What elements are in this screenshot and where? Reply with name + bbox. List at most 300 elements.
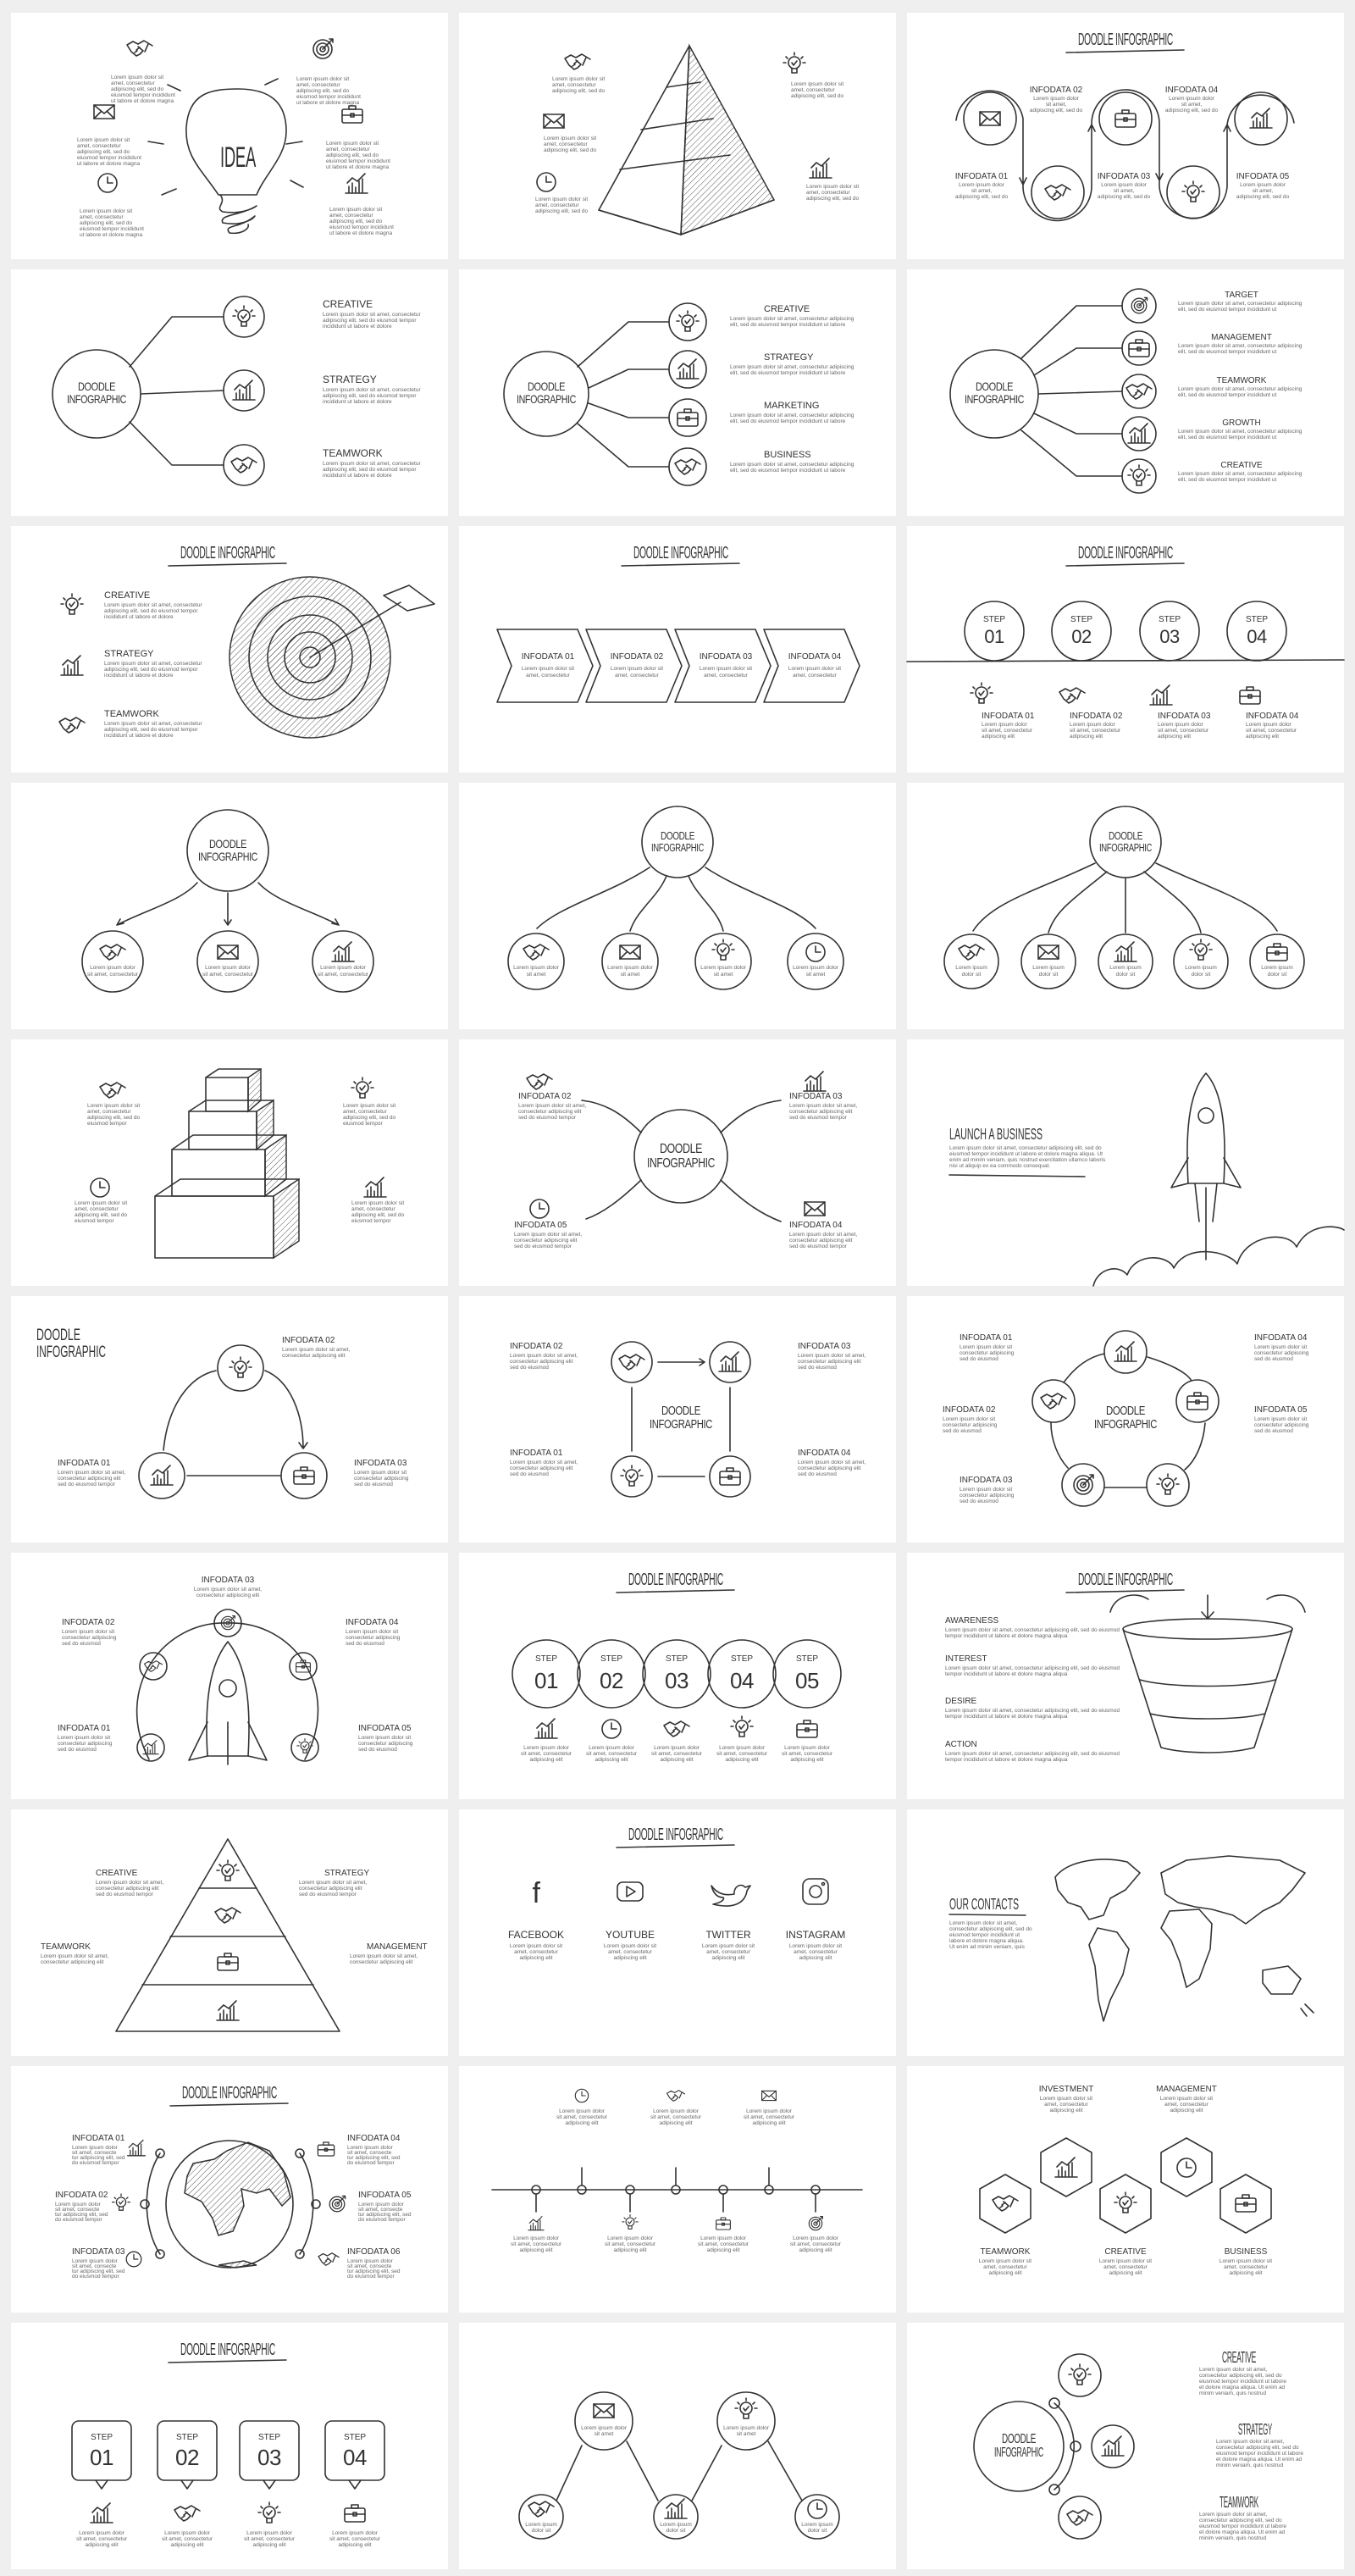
corner items: INFODATA 03 [789, 1092, 843, 1101]
labels: Lorem ipsum dolor [1240, 182, 1286, 188]
main circle: INFOGRAPHIC [67, 392, 126, 406]
step items: Lorem ipsum dolor [332, 2530, 379, 2536]
labels: INFODATA 02 [943, 1405, 996, 1415]
labels: INVESTMENT [1039, 2085, 1093, 2094]
step boxes: STEP [91, 2433, 113, 2442]
text: right 2: adipiscing elit, sed do [806, 196, 860, 202]
circles: Lorem ipsum [525, 2522, 557, 2528]
panel: launch a business [907, 1039, 1344, 1286]
step items: sit amet, consectetur [1246, 728, 1297, 734]
labels: adipiscing elit, sed do [1030, 108, 1082, 114]
top circle [642, 806, 713, 878]
step circles: STEP [983, 615, 1005, 624]
labels: INFODATA 01 [960, 1333, 1013, 1343]
circles: dolor sit [532, 2528, 551, 2534]
branch circles [669, 303, 706, 485]
step items: INFODATA 03 [1158, 712, 1211, 721]
step boxes: 01 [90, 2445, 113, 2470]
text: bottom left: amet, consectetur [80, 214, 124, 220]
labels [955, 86, 1290, 200]
chevron steps: INFODATA 03 [700, 652, 753, 662]
labels: Lorem ipsum dolor [1101, 182, 1148, 188]
panel: step boxes [11, 2323, 448, 2569]
main circle [974, 2401, 1064, 2491]
title: DOODLE INFOGRAPHIC [628, 1825, 723, 1844]
panel: cycle 3 [11, 1296, 448, 1543]
labels: INTEREST [945, 1654, 987, 1664]
heading: LAUNCH A BUSINESS [949, 1126, 1043, 1143]
text: right 1: amet, consectetur [791, 87, 835, 93]
labels: consectetur adipiscing elit [299, 1886, 362, 1892]
right items: sit amet, consecte [358, 2207, 403, 2213]
top circle: INFOGRAPHIC [198, 850, 257, 863]
labels: sed do eiusmod [960, 1356, 998, 1362]
text: top right: Lorem ipsum dolor sit [296, 76, 349, 82]
rocket [189, 1642, 267, 1764]
step items: sit amet, consectetur [329, 2536, 381, 2542]
labels: tempor incididunt ut labore et dolore magna aliqua [945, 1633, 1068, 1639]
text: top left: eiusmod tempor incididunt [111, 92, 175, 98]
panel: hexagons [907, 2066, 1344, 2313]
labels: Lorem ipsum dolor sit amet, consectetur adipiscing [730, 364, 854, 370]
chevron steps: amet, consectetur [615, 673, 660, 679]
labels: Lorem ipsum dolor sit [1254, 1344, 1307, 1350]
labels: Lorem ipsum dolor [959, 182, 1005, 188]
left items: Lorem ipsum dolor [55, 2202, 102, 2208]
corner items: Lorem ipsum dolor sit amet, [789, 1103, 857, 1109]
step circles: STEP [1246, 615, 1268, 624]
labels: consectetur adipiscing [358, 1741, 413, 1747]
text: right 2: amet, consectetur [806, 190, 850, 196]
labels: sed do eiusmod [354, 1482, 393, 1487]
labels: Lorem ipsum dolor sit [960, 1344, 1012, 1350]
items below: adipiscing elit [706, 2247, 740, 2253]
step items: adipiscing elit [982, 734, 1015, 740]
labels: elit, sed do eiusmod tempor incididunt ut [1178, 435, 1277, 440]
branch circles [1122, 289, 1156, 493]
labels: consectetur adipiscing [1254, 1350, 1309, 1356]
labels: Lorem ipsum dolor [1169, 96, 1215, 102]
circles: Lorem ipsum dolor [723, 2425, 770, 2431]
labels: Lorem ipsum dolor sit [354, 1470, 406, 1476]
main circle: INFOGRAPHIC [517, 392, 576, 406]
items above: Lorem ipsum dolor [653, 2108, 700, 2114]
step items: Lorem ipsum dolor [719, 1745, 766, 1751]
social icons [533, 1877, 828, 1909]
text: top left: adipiscing elit, sed do [111, 86, 164, 92]
labels: sed do eiusmod [960, 1499, 998, 1504]
bottom circles: dolor sit [1192, 972, 1211, 978]
step items: adipiscing elit [529, 1757, 563, 1763]
step boxes: 03 [257, 2445, 281, 2470]
step items: adipiscing elit [1070, 734, 1103, 740]
labels: INFODATA 01 [58, 1724, 111, 1733]
labels: TEAMWORK [1217, 376, 1267, 385]
bottom circles: dolor sit [1116, 972, 1136, 978]
labels: elit, sed do eiusmod tempor incididunt ut labore [730, 418, 846, 424]
labels: consectetur adipiscing elit [41, 1959, 104, 1965]
items above: adipiscing elit [752, 2120, 786, 2126]
labels: Lorem ipsum dolor [1033, 96, 1080, 102]
hexagons [980, 2138, 1271, 2233]
icon: bulb [783, 53, 805, 73]
bottom circles: sit amet, consectetur [87, 972, 139, 978]
step items: INFODATA 02 [1070, 712, 1123, 721]
bottom circles [508, 933, 843, 989]
labels: DESIRE [945, 1697, 977, 1706]
icon: chart [810, 158, 832, 178]
labels: adipiscing elit, sed do eiusmod tempor [323, 393, 417, 399]
text: left 1: Lorem ipsum dolor sit [552, 76, 605, 82]
icon: target [313, 39, 333, 58]
text block: nisi ut aliquip ex ea commodo consequat. [949, 1163, 1050, 1169]
panel: snake infodata [907, 13, 1344, 259]
labels: Lorem ipsum dolor sit [960, 1487, 1012, 1493]
labels: elit, sed do eiusmod tempor incididunt ut [1178, 477, 1277, 483]
left items [55, 2134, 145, 2280]
labels [1178, 291, 1302, 483]
step items [76, 2502, 381, 2548]
labels: et dolore magna aliqua. Ut enim ad [1216, 2457, 1302, 2462]
step circles: 05 [795, 1668, 819, 1693]
corner items: sed do eiusmod tempor [514, 1244, 572, 1249]
left items: incididunt ut labore et dolore [104, 614, 174, 620]
left items: Lorem ipsum dolor sit amet, consectetur [104, 602, 202, 608]
step items: Lorem ipsum dolor [1246, 722, 1292, 728]
labels: consectetur adipiscing elit, sed do [1199, 2518, 1282, 2523]
top circle: DOODLE [661, 829, 695, 842]
right items: adipiscing elit, sed do [343, 1115, 396, 1121]
left items: STRATEGY [104, 649, 154, 659]
title [36, 1327, 106, 1361]
labels: incididunt ut labore et dolore [323, 324, 392, 330]
labels: consectetur adipiscing [354, 1476, 409, 1482]
right items: Lorem ipsum dolor sit [343, 1103, 395, 1109]
labels: sed do eiusmod [798, 1365, 837, 1371]
labels: TEAMWORK [1220, 2494, 1258, 2511]
chevron steps: Lorem ipsum dolor sit [788, 666, 841, 672]
labels: Lorem ipsum dolor sit amet, consectetur [323, 461, 421, 467]
labels: consectetur adipiscing elit, sed do [1199, 2373, 1282, 2379]
cycle circles [1032, 1331, 1219, 1506]
step circles: 01 [534, 1668, 558, 1693]
labels: INFODATA 04 [1165, 86, 1219, 95]
chevron steps [497, 629, 860, 702]
labels: consectetur adipiscing elit [96, 1886, 159, 1892]
branch circles [224, 296, 264, 485]
labels: elit, sed do eiusmod tempor incididunt ut [1178, 349, 1277, 355]
labels: sed do eiusmod [943, 1428, 982, 1434]
labels: Lorem ipsum dolor sit amet, [798, 1353, 866, 1359]
labels: YOUTUBE [606, 1929, 655, 1941]
clouds [1093, 1227, 1344, 1286]
text: mid left: amet, consectetur [77, 143, 121, 149]
corner items: sed do eiusmod tempor [789, 1244, 848, 1249]
labels [58, 1576, 413, 1753]
icon: clock [537, 173, 556, 191]
step items: sit amet, consectetur [1158, 728, 1209, 734]
left items: Lorem ipsum dolor sit [75, 1200, 127, 1206]
labels: INFODATA 05 [358, 1724, 412, 1733]
step items: adipiscing elit [1158, 734, 1191, 740]
labels: CREATIVE [1220, 461, 1263, 470]
text: top left: amet, consectetur [111, 80, 155, 86]
left items: eiusmod tempor [75, 1218, 114, 1224]
chevron steps: Lorem ipsum dolor sit [522, 666, 574, 672]
labels: sed do eiusmod [510, 1365, 549, 1371]
labels: adipiscing elit [1170, 2108, 1203, 2113]
step items: Lorem ipsum dolor [654, 1745, 700, 1751]
labels: Lorem ipsum dolor sit amet, consectetur adipiscing [730, 316, 854, 322]
labels: Lorem ipsum dolor sit amet, [798, 1460, 866, 1465]
labels: consectetur adipiscing elit [282, 1353, 346, 1359]
labels: ACTION [945, 1740, 977, 1749]
corner items: INFODATA 04 [789, 1221, 843, 1230]
title: DOODLE INFOGRAPHIC [180, 2341, 275, 2359]
step items: Lorem ipsum dolor [1070, 722, 1116, 728]
right items: amet, consectetur [343, 1109, 387, 1115]
panel: idea bulb [11, 13, 448, 259]
labels: INFODATA 03 [354, 1459, 407, 1468]
main circle [53, 350, 141, 438]
step items: adipiscing elit [1246, 734, 1279, 740]
panel: pyramid [459, 13, 896, 259]
labels: adipiscing elit, sed do [955, 194, 1008, 200]
labels: amet, consectetur [983, 2264, 1028, 2270]
title: IDEA: IDEA [220, 141, 256, 174]
text: left 1: adipiscing elit, sed do [552, 88, 606, 94]
labels: sed do eiusmod [1254, 1356, 1293, 1362]
left items [75, 1083, 141, 1224]
labels: consectetur adipiscing elit [350, 1959, 413, 1965]
step items: Lorem ipsum dolor [589, 1745, 635, 1751]
items above: Lorem ipsum dolor [746, 2108, 793, 2114]
labels: elit, sed do eiusmod tempor incididunt ut labore [730, 370, 846, 376]
panel: tree 3 [11, 783, 448, 1029]
labels: minim veniam, quis nostrud [1199, 2535, 1266, 2541]
circles: dolor sit [808, 2528, 827, 2534]
stacked boxes [155, 1069, 299, 1258]
items above: sit amet, consectetur [744, 2114, 795, 2120]
step items: INFODATA 04 [1246, 712, 1299, 721]
labels [510, 1342, 866, 1477]
labels: STRATEGY [1238, 2421, 1272, 2438]
panel: tree 4 [459, 783, 896, 1029]
labels: elit, sed do eiusmod tempor incididunt ut labore [730, 322, 846, 328]
left items: sit amet, consecte [55, 2207, 100, 2213]
labels: eiusmod tempor incididunt ut labore [1199, 2523, 1286, 2529]
chevron steps: amet, consectetur [704, 673, 749, 679]
step items: Lorem ipsum dolor [164, 2530, 211, 2536]
left items: incididunt ut labore et dolore [104, 733, 174, 739]
labels: Lorem ipsum dolor sit amet, consectetur adipiscing elit, sed do eiusmod [945, 1665, 1120, 1671]
step boxes [72, 2421, 384, 2489]
labels: sed do eiusmod [798, 1471, 837, 1477]
panel: triangle layers [11, 1809, 448, 2056]
labels: Lorem ipsum dolor sit [1040, 2096, 1092, 2102]
labels: amet, consectetur [1103, 2264, 1148, 2270]
left items: amet, consectetur [87, 1109, 131, 1115]
left items: INFODATA 01 [72, 2134, 125, 2143]
labels: consectetur adipiscing [960, 1350, 1015, 1356]
labels [508, 1929, 845, 1961]
text: left 3: adipiscing elit, sed do [535, 208, 589, 214]
bottom circles: sit amet, consectetur [202, 972, 254, 978]
corner items: sed do eiusmod tempor [789, 1115, 848, 1121]
step items: sit amet, consectetur [782, 1751, 833, 1757]
text: bottom left: Lorem ipsum dolor sit [80, 208, 132, 214]
panel: target [11, 526, 448, 773]
bottom circles [944, 934, 1304, 989]
labels: sit amet, [1181, 102, 1202, 108]
step circles: STEP [731, 1654, 753, 1664]
items below: sit amet, consectetur [605, 2241, 656, 2247]
bottom circles: Lorem ipsum [1109, 965, 1142, 971]
labels: CREATIVE [96, 1869, 138, 1878]
labels [979, 2085, 1272, 2276]
right items [343, 1077, 405, 1224]
labels [943, 1333, 1309, 1504]
left items [59, 590, 202, 739]
labels: CREATIVE [1222, 2349, 1256, 2366]
panel: timeline [459, 2066, 896, 2313]
panel: globe [11, 2066, 448, 2313]
main circle: INFOGRAPHIC [965, 392, 1024, 406]
panel: five steps [459, 1553, 896, 1799]
circles: sit amet [737, 2431, 756, 2437]
icon: clock [98, 174, 117, 192]
bottom circles: sit amet [527, 972, 546, 978]
labels: Lorem ipsum dolor sit amet, [41, 1953, 108, 1959]
labels: adipiscing elit [519, 1955, 553, 1961]
circles [519, 2392, 839, 2539]
items above: adipiscing elit [565, 2120, 599, 2126]
left items: amet, consectetur [75, 1206, 119, 1212]
corner items: consectetur adipiscing elit [518, 1109, 582, 1115]
top circle: INFOGRAPHIC [651, 841, 704, 854]
right items: tur adipiscing elit, sed [347, 2269, 401, 2274]
labels: INFODATA 02 [1030, 86, 1083, 95]
labels [41, 1869, 428, 1965]
items above [556, 2089, 795, 2126]
title: DOODLE INFOGRAPHIC [628, 1571, 723, 1589]
left items: do eiusmod tempor [72, 2160, 119, 2166]
text: right 1: adipiscing elit, sed do [791, 93, 844, 99]
items below: adipiscing elit [613, 2247, 647, 2253]
cycle circles [139, 1345, 327, 1499]
labels: Lorem ipsum dolor sit amet, consectetur adipiscing [1178, 471, 1302, 477]
center text: INFOGRAPHIC [1094, 1417, 1157, 1432]
labels: adipiscing elit, sed do [1165, 108, 1218, 114]
chevron steps: Lorem ipsum dolor sit [700, 666, 752, 672]
bottom circles: Lorem ipsum [955, 965, 987, 971]
step items: sit amet, consectetur [521, 1751, 572, 1757]
labels: adipiscing elit [988, 2270, 1022, 2276]
center text: INFOGRAPHIC [650, 1417, 712, 1432]
bottom circles: Lorem ipsum dolor [320, 965, 367, 971]
labels [1199, 2349, 1303, 2541]
right items: amet, consectetur [351, 1206, 395, 1212]
labels: consectetur adipiscing elit [196, 1593, 259, 1598]
labels: MANAGEMENT [1211, 333, 1272, 342]
left items: sit amet, consecte [72, 2263, 117, 2269]
arrows [973, 863, 1277, 933]
labels: Lorem ipsum dolor sit amet, [350, 1953, 418, 1959]
arrows [537, 867, 816, 931]
left items: tur adipiscing elit, sed [72, 2155, 125, 2161]
labels: INFODATA 05 [1254, 1405, 1308, 1415]
chevron steps: INFODATA 01 [522, 652, 575, 662]
step items: Lorem ipsum dolor [523, 1745, 570, 1751]
bottom circles: dolor sit [962, 972, 982, 978]
labels [58, 1336, 409, 1487]
panel: four branches [459, 269, 896, 516]
labels: INFODATA 01 [58, 1459, 111, 1468]
labels: INFODATA 03 [1098, 172, 1151, 181]
labels: Lorem ipsum dolor sit [1254, 1416, 1307, 1422]
globe [166, 2141, 293, 2268]
labels: INFODATA 01 [510, 1449, 563, 1458]
labels: Lorem ipsum dolor sit amet, consectetur adipiscing [1178, 301, 1302, 307]
text: mid right: eiusmod tempor incididunt [326, 158, 390, 164]
labels: Lorem ipsum dolor sit amet, consectetur adipiscing [1178, 343, 1302, 349]
triangle [116, 1839, 340, 2031]
labels: adipiscing elit, sed do [1098, 194, 1150, 200]
center circle: DOODLE [660, 1142, 702, 1156]
labels [323, 298, 421, 479]
labels: consectetur adipiscing elit [510, 1359, 573, 1365]
labels: Lorem ipsum dolor sit amet, consectetur adipiscing [730, 462, 854, 468]
panel: cycle 4 [459, 1296, 896, 1543]
labels: Lorem ipsum dolor sit amet, [1199, 2512, 1267, 2518]
right items: do eiusmod tempor [347, 2274, 395, 2280]
right items: Lorem ipsum dolor sit [351, 1200, 404, 1206]
labels: consectetur adipiscing [1254, 1422, 1309, 1428]
labels: Lorem ipsum dolor sit [510, 1943, 562, 1949]
corner items [514, 1072, 857, 1249]
labels: Lorem ipsum dolor sit [979, 2258, 1031, 2264]
text block: Lorem ipsum dolor sit amet, consectetur adipiscing elit, sed do [949, 1145, 1102, 1151]
labels: CREATIVE [323, 298, 373, 310]
items below: adipiscing elit [519, 2247, 553, 2253]
panel: steps line [907, 526, 1344, 773]
text block: labore et dolore magna aliqua. [949, 1938, 1024, 1944]
labels: Lorem ipsum dolor sit [62, 1629, 114, 1635]
snake path [956, 90, 1294, 220]
text: bottom right: adipiscing elit, sed do [329, 219, 383, 224]
labels: sed do eiusmod [62, 1641, 101, 1647]
labels: FACEBOOK [508, 1929, 564, 1941]
circles: Lorem ipsum dolor [581, 2425, 628, 2431]
arrows [556, 2441, 802, 2501]
items below: adipiscing elit [799, 2247, 832, 2253]
labels: sed do eiusmod [510, 1471, 549, 1477]
text: top right: ut labore et dolore magna [296, 100, 359, 106]
right items: eiusmod tempor [343, 1121, 383, 1127]
labels: minim veniam, quis nostrud [1199, 2390, 1266, 2396]
right items: eiusmod tempor [351, 1218, 391, 1224]
circles: Lorem ipsum [660, 2522, 692, 2528]
center circle [634, 1110, 727, 1203]
labels: Lorem ipsum dolor sit [1160, 2096, 1213, 2102]
labels: adipiscing elit [799, 1955, 832, 1961]
panel: tree 5 [907, 783, 1344, 1029]
labels: incididunt ut labore et dolore [323, 473, 392, 479]
icon: chart [346, 174, 368, 193]
labels: Lorem ipsum dolor sit amet, [510, 1353, 578, 1359]
items below: sit amet, consectetur [698, 2241, 749, 2247]
step items: adipiscing elit [725, 1757, 759, 1763]
